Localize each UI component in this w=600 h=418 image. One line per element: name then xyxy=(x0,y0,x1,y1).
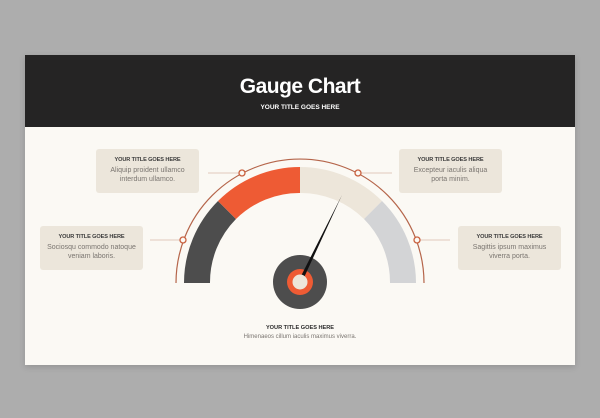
box: right: viverra porta. xyxy=(489,253,530,260)
box: top-left: interdum ullamco. xyxy=(120,176,175,183)
box: top-left: YOUR TITLE GOES HERE xyxy=(114,157,181,163)
bottom caption xyxy=(244,325,356,340)
box: top-left xyxy=(96,149,199,193)
box: top-right: porta minim. xyxy=(431,176,470,183)
box: top-left: Aliquip proident ullamco xyxy=(110,167,185,174)
hub xyxy=(273,255,327,309)
box: top-right: YOUR TITLE GOES HERE xyxy=(417,157,484,163)
box: right: YOUR TITLE GOES HERE xyxy=(476,234,543,240)
gauge segments xyxy=(184,167,416,283)
header band xyxy=(25,55,575,127)
bottom caption: Himenaeos cillum iaculis maximus viverra. xyxy=(244,334,356,340)
box: top-right: Excepteur iaculis aliqua xyxy=(414,167,487,174)
box: left: Sociosqu commodo natoque xyxy=(47,244,136,251)
connector lines xyxy=(150,173,450,240)
bottom caption: YOUR TITLE GOES HERE xyxy=(266,325,334,331)
subtitle: YOUR TITLE GOES HERE xyxy=(260,104,340,111)
outer thin arc xyxy=(176,159,424,283)
title: Gauge Chart xyxy=(240,75,360,98)
box: left: YOUR TITLE GOES HERE xyxy=(58,234,125,240)
box: top-right xyxy=(399,149,502,193)
box: right: Sagittis ipsum maximus xyxy=(473,244,546,251)
marker dots xyxy=(180,170,420,243)
box: right xyxy=(458,226,561,270)
box: left xyxy=(40,226,143,270)
card background xyxy=(25,55,575,365)
needle xyxy=(298,195,342,283)
box: left: veniam laboris. xyxy=(68,253,115,260)
